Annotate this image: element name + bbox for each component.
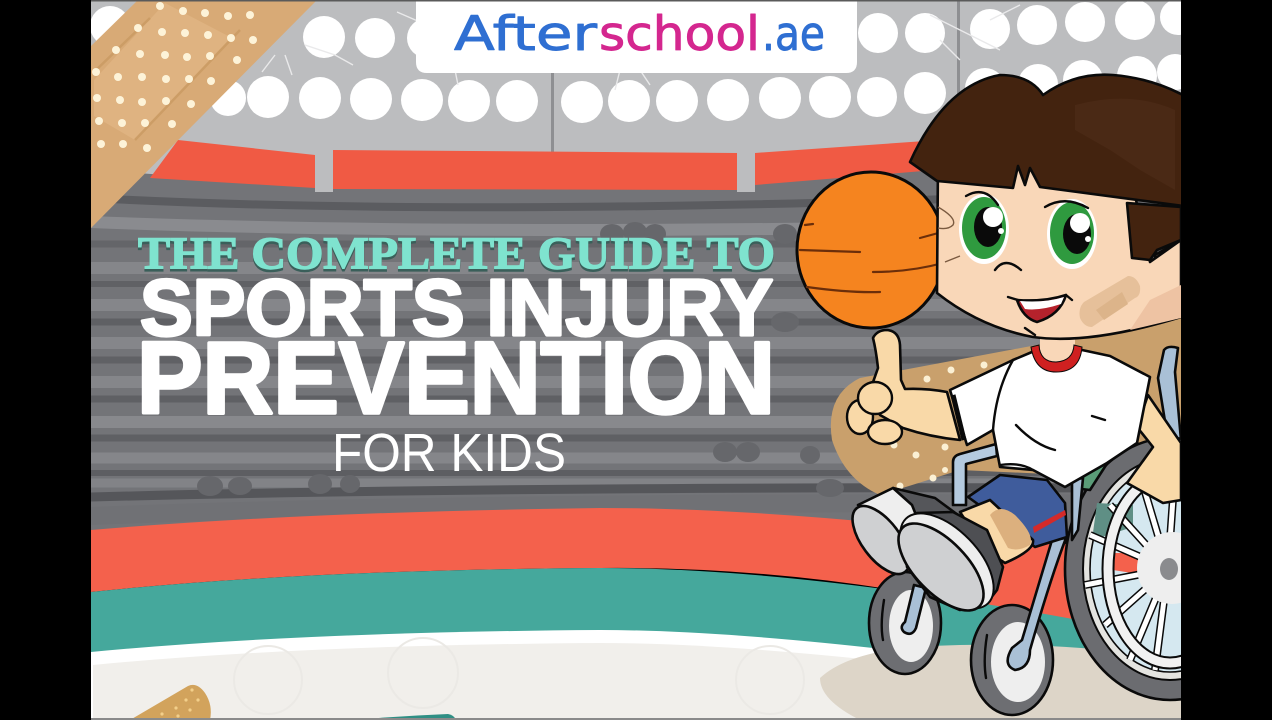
- title line 1: THE COMPLETE GUIDE TO: [138, 228, 775, 278]
- title line 2: SPORTS INJURY: [140, 263, 773, 352]
- teal shape at bottom: [379, 714, 455, 718]
- title line 4: FOR KIDS: [332, 423, 566, 483]
- neck and collar: [1031, 335, 1082, 372]
- front shoe: [897, 510, 1004, 612]
- big wheel: [1064, 437, 1181, 702]
- bandage: top left: [91, 0, 317, 228]
- title line 1: [138, 238, 774, 272]
- seat back: [1138, 442, 1139, 443]
- shirt: [950, 350, 1150, 487]
- right arm: [1127, 395, 1181, 503]
- right small wheel: [971, 538, 1066, 715]
- logo text: [454, 14, 824, 51]
- left eye: [959, 192, 1009, 264]
- ear line behind ball: [938, 207, 960, 262]
- mouth: [1008, 295, 1072, 335]
- arm rest frame: [953, 444, 997, 505]
- wheelchair back frame: [1158, 347, 1181, 440]
- hair: [910, 75, 1183, 206]
- stadium upper wall: [91, 2, 1181, 174]
- large bandage behind kid: [831, 318, 1181, 495]
- light cracks: [262, 5, 1020, 90]
- sleeve cuff: [953, 395, 964, 440]
- fist knuckles: [847, 382, 902, 444]
- logo plate: [416, 0, 857, 73]
- title line 2: [140, 278, 774, 416]
- upper red band: [150, 140, 935, 190]
- title line 3: PREVENTION: [137, 321, 775, 435]
- right eye: [1045, 199, 1097, 269]
- lower red band: [91, 508, 1072, 619]
- back shoe: [851, 486, 958, 576]
- arena floor: [91, 630, 874, 718]
- arm and raised finger: [872, 330, 960, 440]
- faint floor sports balls: [246, 637, 792, 654]
- support posts: [315, 184, 755, 192]
- frame strut: [1072, 478, 1083, 540]
- sand patch under wheelchair: [820, 645, 1181, 720]
- shorts: [968, 475, 1067, 547]
- bandage: bottom left: [130, 685, 211, 720]
- knee bandage: [990, 509, 1031, 549]
- grandstand seating: [91, 165, 1181, 535]
- ball: [797, 172, 945, 328]
- face: [937, 160, 1181, 339]
- cheek bandage: [1080, 276, 1140, 327]
- floodlight poles: [551, 0, 960, 155]
- ear: [1155, 240, 1181, 295]
- teal band: [91, 568, 1085, 652]
- side hair: [1127, 203, 1181, 260]
- logo text: After: [454, 7, 598, 62]
- leg: [960, 500, 1033, 563]
- title line 1: THE COMPLETE GUIDE TO: [138, 231, 775, 281]
- kid in wheelchair: [796, 73, 1181, 716]
- nose: [995, 263, 1021, 270]
- title: [137, 228, 775, 483]
- logo text: school: [599, 7, 760, 62]
- red shorts stripe: [1033, 510, 1066, 533]
- left small wheel: [869, 572, 941, 674]
- floodlights: [90, 0, 1196, 123]
- green seat: [1083, 466, 1108, 492]
- logo text: .ae: [762, 7, 825, 62]
